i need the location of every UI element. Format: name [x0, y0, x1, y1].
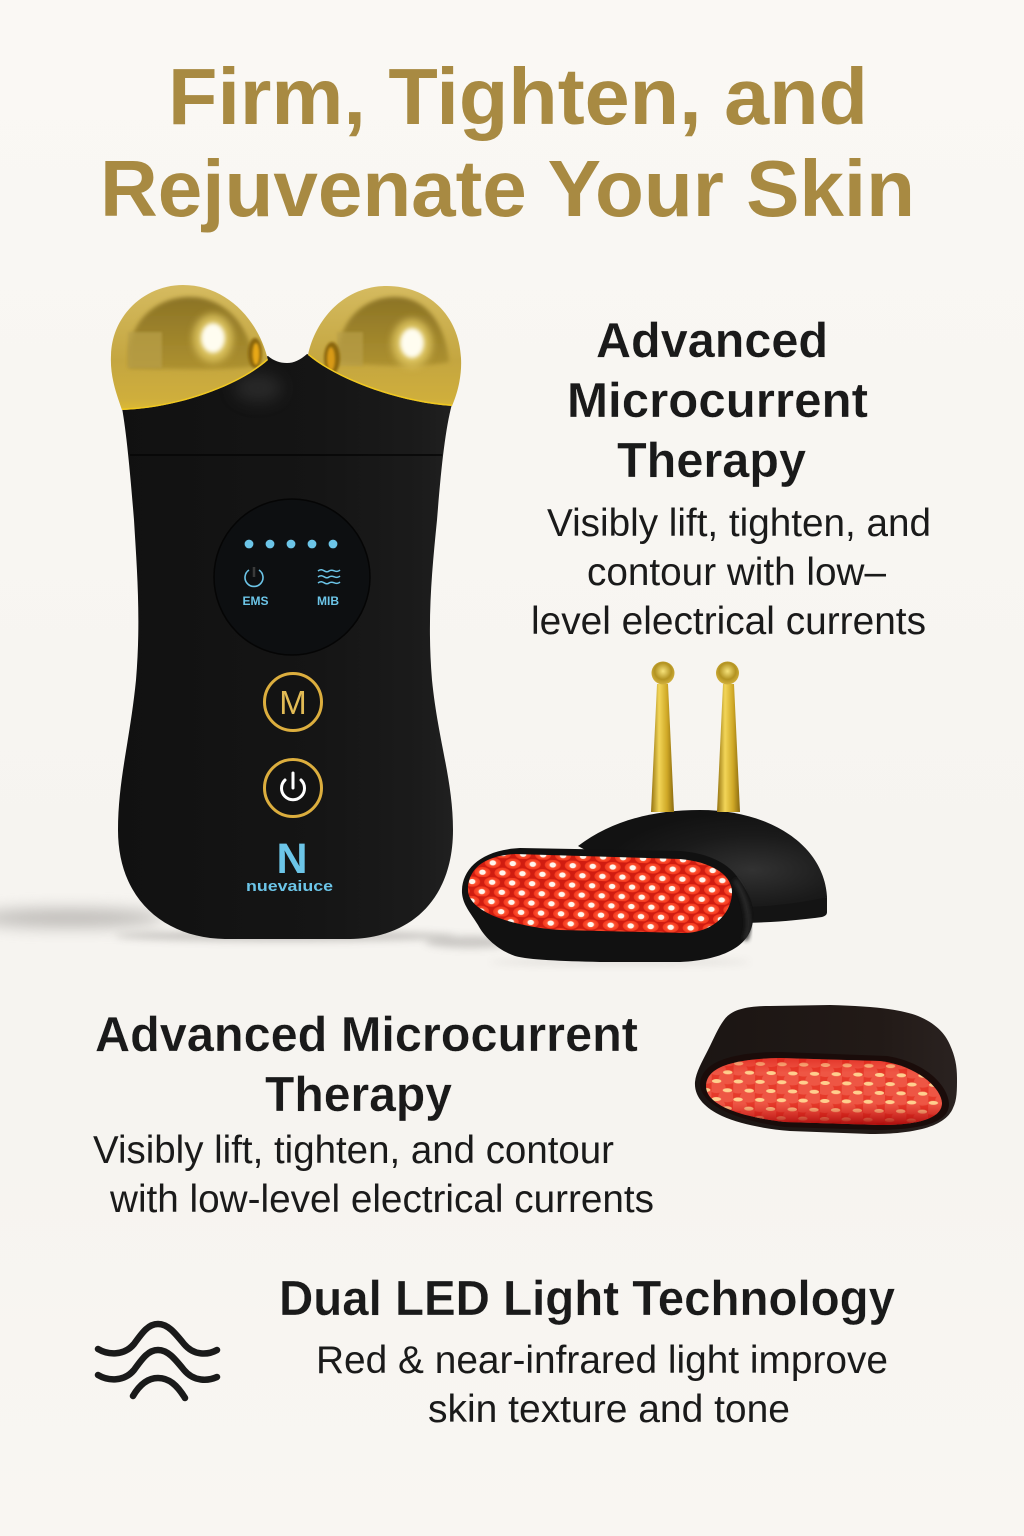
right gold ball: [308, 286, 462, 406]
left gold ball: [110, 285, 268, 410]
LED module side view: [695, 1005, 957, 1134]
brand logo: nuevaiuce: [246, 878, 333, 895]
heading block: dual LED: [279, 1272, 895, 1431]
title: [100, 52, 915, 233]
heading block: microcurrent (upper): contour with low–: [587, 551, 887, 594]
heading block: microcurrent (upper): [531, 314, 931, 643]
rim: [700, 1052, 949, 1130]
icon: EMS power: [245, 567, 263, 586]
floor shadows: [0, 909, 750, 965]
brand logo: N: [276, 835, 308, 883]
dome base: [735, 897, 827, 923]
heading block: dual LED: Dual LED Light Technology: [279, 1272, 895, 1326]
label: EMS: EMS: [242, 594, 269, 608]
brand logo: [246, 835, 333, 895]
LED array: [468, 854, 732, 933]
title: Rejuvenate Your Skin: [100, 144, 915, 233]
M button: [264, 674, 322, 730]
icon: MIB waves: [318, 570, 340, 584]
heading block: dual LED: skin texture and tone: [428, 1388, 790, 1431]
power button: [264, 760, 322, 816]
LED module front: [462, 848, 753, 962]
right prong: [716, 662, 740, 812]
title: Firm, Tighten, and: [168, 52, 868, 141]
heading block: microcurrent (upper): level electrical currents: [531, 600, 926, 643]
seam line: [130, 454, 442, 456]
icon: light waves: [98, 1324, 217, 1398]
left prong: [651, 662, 674, 812]
heading block: microcurrent (lower): Therapy: [265, 1068, 452, 1122]
prong attachment: [578, 662, 827, 923]
indicator dots: [245, 540, 337, 548]
dome: [578, 810, 827, 907]
display panel: [214, 499, 370, 655]
neck highlight: [234, 374, 282, 402]
heading block: microcurrent (lower): Visibly lift, tighten, and contour: [93, 1129, 614, 1172]
heading block: microcurrent (lower): [93, 1008, 654, 1221]
heading block: dual LED: Red & near-infrared light improve: [316, 1339, 888, 1382]
heading block: microcurrent (lower): with low-level electrical currents: [109, 1178, 654, 1221]
heading block: microcurrent (upper): Therapy: [617, 434, 806, 488]
main device: [105, 280, 470, 939]
M button: M: [279, 684, 307, 721]
device body: [118, 354, 453, 939]
module shell: [462, 848, 753, 962]
heading block: microcurrent (lower): Advanced Microcurrent: [95, 1008, 638, 1062]
heading block: microcurrent (upper): Visibly lift, tighten, and: [547, 502, 931, 545]
LED array: [706, 1058, 942, 1125]
module shell: [695, 1005, 957, 1134]
heading block: microcurrent (upper): Advanced: [596, 314, 828, 368]
label: MIB: MIB: [317, 594, 339, 608]
heading block: microcurrent (upper): Microcurrent: [567, 374, 868, 428]
